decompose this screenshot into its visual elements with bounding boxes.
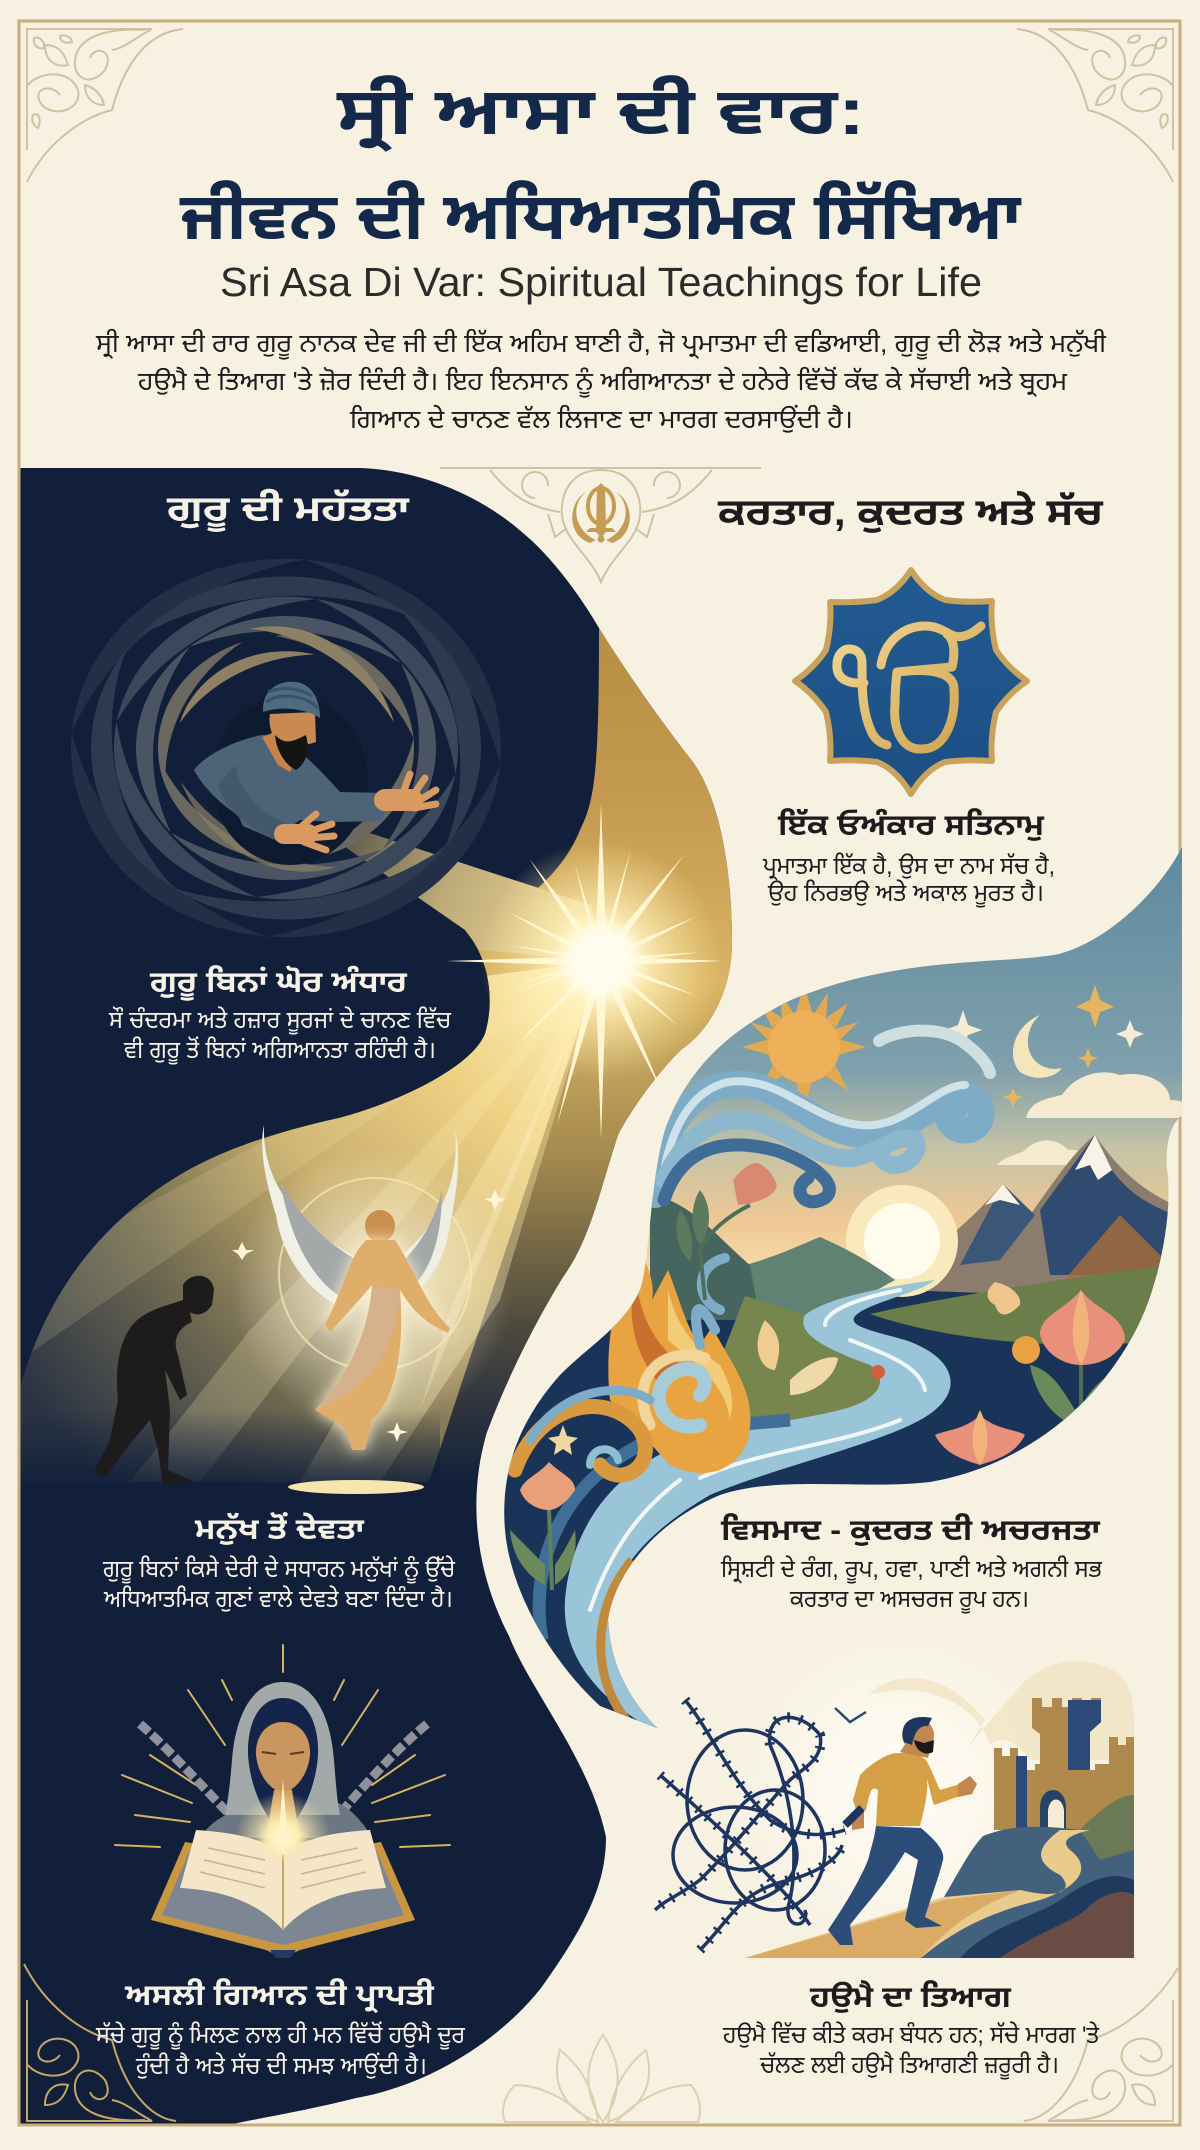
- text: wonder of nature: [720, 1512, 1103, 1614]
- text: wonder of nature: ਕਰਤਾਰ ਦਾ ਅਸਚਰਜ ਰੂਪ ਹਨ।: [789, 1586, 1029, 1614]
- figure: hooded woman: [200, 1682, 372, 1838]
- text: ik onkar satnam: ਇੱਕ ਓਅੰਕਾਰ ਸਤਿਨਾਮੁ: [777, 807, 1045, 842]
- intro paragraph: [95, 328, 1106, 434]
- hills: [749, 1237, 895, 1316]
- title: [179, 74, 1022, 253]
- intro paragraph: ਹਉਮੈ ਦੇ ਤਿਆਗ 'ਤੇ ਜ਼ੋਰ ਦਿੰਦੀ ਹੈ। ਇਹ ਇਨਸਾਨ ਨੂੰ ਅਗਿਆਨਤਾ ਦੇ ਹਨੇਰੇ ਵਿੱਚੋਂ ਕੱਢ ਕੇ ਸੱਚਾਈ ਅਤੇ ਬ੍ਰਹਮ: [137, 366, 1068, 398]
- illustration: nature wonder: [480, 840, 1200, 1740]
- bottom lotus ornament: [503, 2035, 700, 2122]
- text: ik onkar satnam: [762, 807, 1055, 908]
- swirl spiral and gold wave: [515, 1258, 725, 1475]
- text: ik onkar satnam: ਪ੍ਰਮਾਤਮਾ ਇੱਕ ਹੈ, ਉਸ ਦਾ ਨਾਮ ਸੱਚ ਹੈ,: [762, 852, 1055, 881]
- text: man to deity: ਅਧਿਆਤਮਿਕ ਗੁਣਾਂ ਵਾਲੇ ਦੇਵਤੇ ਬਣਾ ਦਿੰਦਾ ਹੈ।: [103, 1585, 453, 1613]
- icon: crescent moon: [1013, 1015, 1062, 1078]
- corner ornament: top left: [27, 29, 183, 182]
- text: without guru darkness: ਸੌ ਚੰਦਰਮਾ ਅਤੇ ਹਜ਼ਾਰ ਸੂਰਜਾਂ ਦੇ ਚਾਨਣ ਵਿੱਚ: [108, 1006, 451, 1035]
- text: renouncing ego: [722, 1979, 1100, 2080]
- text: attaining true knowledge: ਹੁੰਦੀ ਹੈ ਅਤੇ ਸੱਚ ਦੀ ਸਮਝ ਆਉਂਦੀ ਹੈ।: [135, 2052, 427, 2080]
- heading: importance of guru: ਗੁਰੂ ਦੀ ਮਹੱਤਤਾ: [166, 487, 410, 533]
- figure: running man: [828, 1717, 977, 1945]
- heading: creator, nature, truth: ਕਰਤਾਰ, ਕੁਦਰਤ ਅਤੇ ਸੱਚ: [717, 490, 1103, 534]
- chains: [140, 1724, 427, 1830]
- scene: castle and hills: [745, 1698, 1134, 1958]
- thorny chains: [655, 1700, 845, 1950]
- figure: bowed man silhouette: [94, 1276, 214, 1485]
- centre ornament with khanda: [440, 468, 761, 582]
- flowers: [510, 1163, 1145, 1590]
- mountains: [927, 1135, 1168, 1299]
- glowing floor disc: [288, 1480, 424, 1494]
- illustration: man to angel: [94, 1125, 512, 1494]
- subtitle: Sri Asa Di Var: Spiritual Teachings for Life: [220, 259, 982, 305]
- text: renouncing ego: ਹਉਮੈ ਵਿੱਚ ਕੀਤੇ ਕਰਮ ਬੰਧਨ ਹਨ; ਸੱਚੇ ਮਾਰਗ 'ਤੇ: [722, 2021, 1100, 2049]
- river: [539, 1280, 951, 1728]
- corner ornament: bottom right: [1024, 1968, 1178, 2121]
- intro paragraph: ਗਿਆਨ ਦੇ ਚਾਨਣ ਵੱਲ ਲਿਜਾਣ ਦਾ ਮਾਰਗ ਦਰਸਾਉਂਦੀ ਹੈ।: [349, 404, 853, 434]
- text: wonder of nature: ਵਿਸਮਾਦ - ਕੁਦਰਤ ਦੀ ਅਚਰਜਤਾ: [720, 1512, 1100, 1547]
- icon: sun: [742, 992, 866, 1098]
- title: ਜੀਵਨ ਦੀ ਅਧਿਆਤਮਿਕ ਸਿੱਖਿਆ: [179, 179, 1022, 253]
- text: ik onkar satnam: ਉਹ ਨਿਰਭਉ ਅਤੇ ਅਕਾਲ ਮੂਰਤ ਹੈ।: [767, 879, 1044, 908]
- text: without guru darkness: ਗੁਰੂ ਬਿਨਾਂ ਘੋਰ ਅੰਧਾਰ: [149, 964, 407, 1001]
- clouds: [997, 1072, 1190, 1165]
- figure: man reaching out: [194, 682, 436, 850]
- text: wonder of nature: ਸ੍ਰਿਸ਼ਟੀ ਦੇ ਰੰਗ, ਰੂਪ, ਹਵਾ, ਪਾਣੀ ਅਤੇ ਅਗਨੀ ਸਭ: [720, 1555, 1103, 1584]
- text: without guru darkness: ਵੀ ਗੁਰੂ ਤੋਂ ਬਿਨਾਂ ਅਗਿਆਨਤਾ ਰਹਿੰਦੀ ਹੈ।: [123, 1036, 436, 1065]
- text: man to deity: [102, 1511, 455, 1613]
- text: renouncing ego: ਹਉਮੈ ਦਾ ਤਿਆਗ: [809, 1979, 1012, 2014]
- panel: golden light band: [20, 628, 732, 1482]
- text: attaining true knowledge: ਸੱਚੇ ਗੁਰੂ ਨੂੰ ਮਿਲਣ ਨਾਲ ਹੀ ਮਨ ਵਿੱਚੋਂ ਹਉਮੈ ਦੂਰ: [95, 2021, 466, 2050]
- illustration: woman with open book: [115, 1645, 450, 1958]
- icon: open book: [151, 1830, 415, 1958]
- illustration: vortex with man: [14, 506, 558, 987]
- text: man to deity: ਗੁਰੂ ਬਿਨਾਂ ਕਿਸੇ ਦੇਰੀ ਦੇ ਸਧਾਰਨ ਮਨੁੱਖਾਂ ਨੂੰ ਉੱਚੇ: [102, 1555, 455, 1584]
- hand: lower: [284, 814, 334, 850]
- icon: radiant star: [446, 803, 723, 1139]
- text: attaining true knowledge: ਅਸਲੀ ਗਿਆਨ ਦੀ ਪ੍ਰਾਪਤੀ: [124, 1977, 435, 2014]
- text: man to deity: ਮਨੁੱਖ ਤੋਂ ਦੇਵਤਾ: [194, 1511, 364, 1546]
- intro paragraph: ਸ੍ਰੀ ਆਸਾ ਦੀ ਰਾਰ ਗੁਰੂ ਨਾਨਕ ਦੇਵ ਜੀ ਦੀ ਇੱਕ ਅਹਿਮ ਬਾਣੀ ਹੈ, ਜੋ ਪ੍ਰਮਾਤਮਾ ਦੀ ਵਡਿਆਈ, ਗੁਰੂ ਦੀ ਲੋੜ ਅਤੇ ਮਨੁੱਖੀ: [95, 328, 1106, 360]
- text: without guru darkness: [108, 964, 451, 1065]
- corner ornament: top right: [1017, 29, 1173, 182]
- setting sun: [846, 1185, 958, 1297]
- clouds behind castle: [868, 1661, 1134, 1760]
- text: attaining true knowledge: [95, 1977, 466, 2080]
- figure: angel: [232, 1125, 512, 1450]
- light beam from hand to star: [338, 825, 601, 961]
- corner ornament: bottom left: [24, 1964, 176, 2121]
- wind waves: [655, 1031, 990, 1202]
- panel: dark guru section: [20, 468, 732, 2124]
- title: ਸ੍ਰੀ ਆਸਾ ਦੀ ਵਾਰ:: [336, 74, 865, 152]
- icon: ik onkar badge: [795, 570, 1027, 794]
- text: renouncing ego: ਚੱਲਣ ਲਈ ਹਉਮੈ ਤਿਆਗਣੀ ਜ਼ਰੂਰੀ ਹੈ।: [759, 2051, 1059, 2080]
- hand: raised: [385, 774, 436, 808]
- flames: [608, 1262, 750, 1473]
- illustration: breaking ego chains: [654, 1661, 1134, 1958]
